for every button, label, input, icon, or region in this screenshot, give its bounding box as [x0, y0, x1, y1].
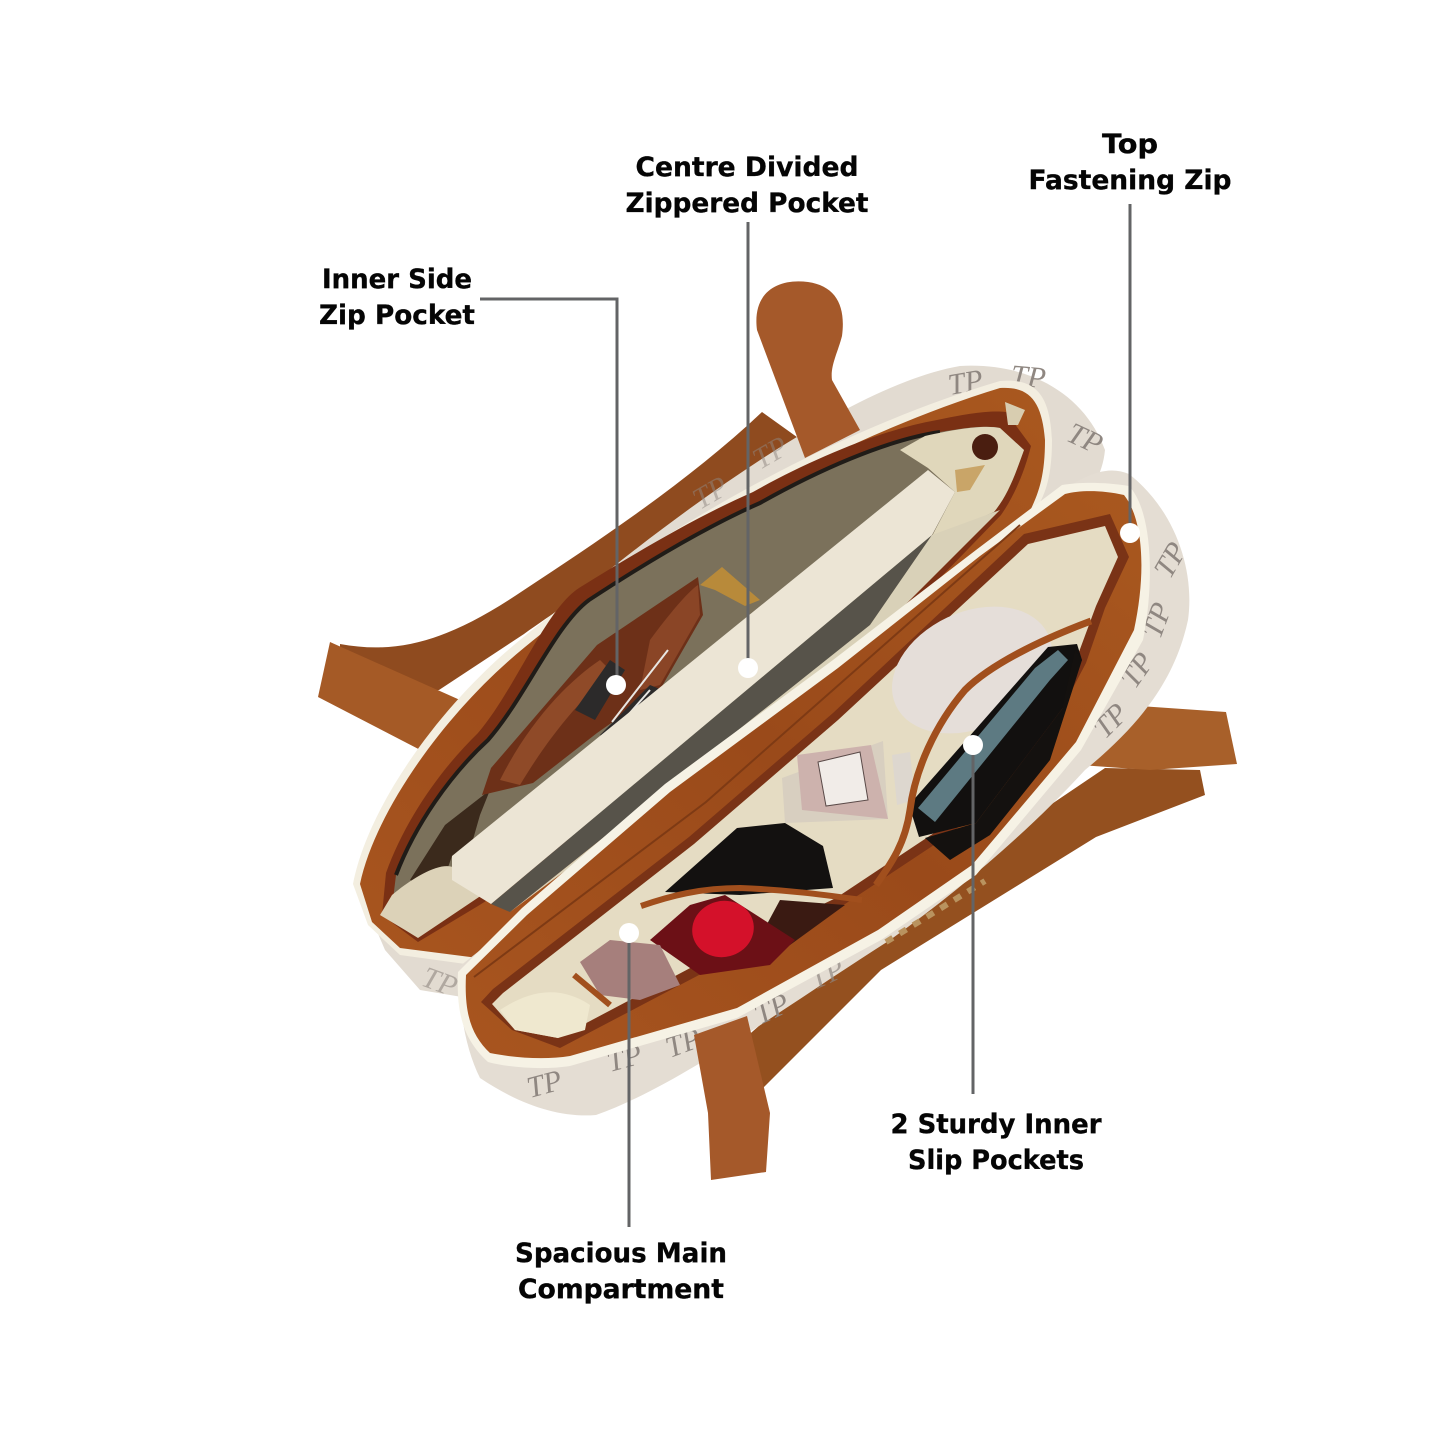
front body panel with monogram: TP — [1114, 646, 1161, 694]
second slip pocket edge — [574, 888, 862, 1005]
upper compartment interior — [380, 402, 1031, 942]
front body panel with monogram — [460, 470, 1194, 1115]
back strap tab — [318, 642, 460, 755]
callout: spacious main compartment — [515, 923, 727, 1305]
front body panel with monogram: TP — [603, 1038, 646, 1079]
dark shadow under lower pocket — [745, 900, 845, 965]
callout: inner side zip pocket: Inner Side — [322, 264, 472, 295]
back body panel with monogram: TP — [747, 430, 794, 476]
front handle — [694, 1016, 770, 1180]
callout: centre divided zippered pocket: Zippered Pocket — [626, 188, 869, 219]
callout: sturdy inner slip pockets: 2 Sturdy Inner — [890, 1109, 1102, 1140]
back body panel with monogram — [355, 359, 1108, 1004]
back body panel with monogram: TP — [687, 470, 734, 516]
callout: top fastening zip: Fastening Zip — [1028, 165, 1232, 196]
back body panel with monogram: TP — [1062, 416, 1108, 461]
callout: spacious main compartment: Spacious Main — [515, 1238, 727, 1269]
callout: inner side zip pocket: Zip Pocket — [319, 300, 475, 331]
front strap tab — [1080, 704, 1237, 770]
callout: sturdy inner slip pockets — [890, 735, 1102, 1176]
upper compartment cream edge and brown rim — [353, 381, 1052, 966]
callout: top fastening zip: Top — [1102, 129, 1158, 160]
pink bottle — [580, 940, 680, 1000]
callout: spacious main compartment: Compartment — [518, 1274, 724, 1305]
back body panel with monogram: TP — [1009, 359, 1047, 395]
wallet in side pocket — [482, 567, 760, 795]
bag illustration — [318, 281, 1237, 1180]
back body panel with monogram: TP — [945, 363, 986, 402]
black compact case — [665, 823, 833, 895]
white powder compact — [871, 582, 1073, 758]
callout: inner side zip pocket — [319, 264, 626, 695]
slip pocket edge — [876, 621, 1091, 885]
front compartment cream edge and brown rim — [458, 483, 1150, 1068]
back strap top loop — [756, 281, 860, 458]
callout: centre divided zippered pocket: Centre Divided — [636, 152, 858, 183]
front compartment interior — [481, 514, 1129, 1048]
front body panel with monogram: TP — [661, 1022, 705, 1065]
front body panel with monogram: TP — [749, 987, 795, 1031]
fold seam between compartments — [474, 525, 1020, 977]
front body panel with monogram: TP — [804, 952, 850, 996]
nail polish bottle — [782, 741, 915, 823]
callout: centre divided zippered pocket — [626, 152, 869, 678]
book — [452, 470, 955, 904]
callout: top fastening zip — [1028, 129, 1232, 543]
front body panel with monogram: TP — [1136, 598, 1179, 642]
red lipstick — [650, 894, 795, 975]
back strap band — [340, 412, 815, 700]
front strap band — [720, 768, 1205, 1090]
front body panel with monogram: TP — [523, 1064, 566, 1105]
phone in slip pocket — [909, 644, 1082, 860]
front body panel with monogram: TP — [1147, 537, 1194, 584]
brand hardware — [886, 881, 985, 942]
back body panel with monogram: TP — [418, 961, 462, 1004]
front body panel with monogram: TP — [1087, 697, 1135, 745]
callout: sturdy inner slip pockets: Slip Pockets — [908, 1145, 1084, 1176]
